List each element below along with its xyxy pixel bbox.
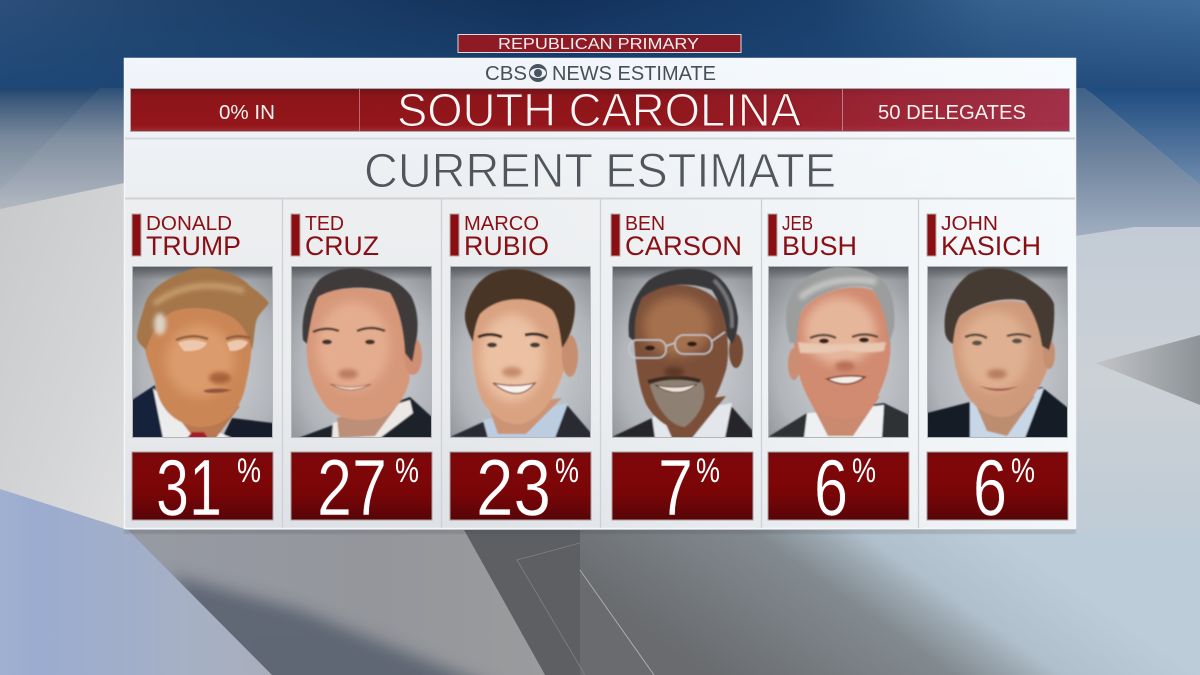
precincts reporting: 0% IN xyxy=(219,102,275,124)
name xyxy=(782,212,857,261)
candidate: John Kasich: 6 xyxy=(973,443,1007,532)
portrait xyxy=(927,266,1068,438)
candidate: Marco Rubio: 23 xyxy=(476,443,551,532)
portrait xyxy=(450,266,591,438)
state header bar xyxy=(130,84,1070,136)
name: TED xyxy=(305,212,344,235)
candidate: Jeb Bush: 6 xyxy=(814,443,848,532)
banner: republican primary: REPUBLICAN PRIMARY xyxy=(498,36,699,53)
source line: CBS News estimate: NEWS ESTIMATE xyxy=(552,63,716,85)
main panel xyxy=(124,58,1076,528)
result xyxy=(768,452,909,520)
candidate: Ted Cruz: % xyxy=(395,452,419,490)
name: CRUZ xyxy=(305,231,379,261)
result xyxy=(291,452,432,520)
candidate: Ted Cruz xyxy=(291,212,432,532)
result xyxy=(450,452,591,520)
candidate: Marco Rubio xyxy=(450,212,591,532)
name xyxy=(941,212,1041,261)
candidate: Jeb Bush xyxy=(768,212,909,532)
name xyxy=(625,212,742,261)
name: BUSH xyxy=(782,231,857,261)
delegates: 50 DELEGATES xyxy=(878,102,1026,124)
candidate: John Kasich: % xyxy=(1011,452,1035,490)
candidate: Ben Carson xyxy=(611,212,753,532)
portrait xyxy=(612,266,753,438)
banner: republican primary xyxy=(458,34,741,53)
name: JOHN xyxy=(941,212,998,235)
source line: CBS News estimate: CBS xyxy=(485,63,527,85)
portrait xyxy=(132,266,273,438)
name xyxy=(464,212,549,261)
icon: CBS eye xyxy=(529,64,547,82)
result xyxy=(612,452,753,520)
candidate: Donald Trump xyxy=(132,212,273,532)
candidate: Donald Trump: % xyxy=(237,452,261,490)
name: RUBIO xyxy=(464,231,549,261)
state name: SOUTH CAROLINA xyxy=(397,84,801,136)
name: DONALD xyxy=(146,212,232,235)
candidate: Donald Trump: 31 xyxy=(156,443,222,532)
name xyxy=(146,212,241,261)
name xyxy=(305,212,379,261)
portrait xyxy=(291,266,432,438)
name: CARSON xyxy=(625,231,742,261)
candidate: John Kasich xyxy=(927,212,1068,532)
candidate: Jeb Bush: % xyxy=(852,452,876,490)
name: MARCO xyxy=(464,212,539,235)
candidate: Ben Carson: % xyxy=(696,452,720,490)
candidate: Marco Rubio: % xyxy=(555,452,579,490)
portrait xyxy=(768,266,909,438)
candidate: Ben Carson: 7 xyxy=(658,443,693,532)
name: KASICH xyxy=(941,231,1041,261)
name: BEN xyxy=(625,212,665,235)
heading: current estimate: CURRENT ESTIMATE xyxy=(364,145,836,198)
name: JEB xyxy=(782,212,813,235)
candidate: Ted Cruz: 27 xyxy=(317,443,387,532)
name: TRUMP xyxy=(146,231,241,261)
result xyxy=(132,452,273,520)
result xyxy=(927,452,1068,520)
